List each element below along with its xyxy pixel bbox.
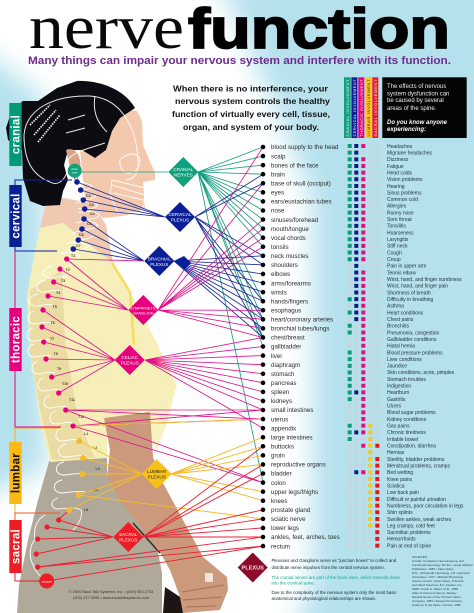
symptom list: Sterility, bladder problems bbox=[387, 457, 445, 463]
spine dots bbox=[34, 164, 87, 588]
symptom list: Blood sugar problems bbox=[387, 410, 436, 416]
body part list: arms/forearms bbox=[271, 280, 311, 287]
column headers: CERVICAL INVOLVEMENT bbox=[352, 79, 357, 136]
diamond: sacral plexus: SACRAL bbox=[119, 532, 138, 537]
symptom list: Ulcers bbox=[387, 404, 402, 410]
body part list: stomach bbox=[271, 371, 295, 378]
body part list: chest/breast bbox=[271, 335, 305, 342]
body part list: diaphragm bbox=[271, 362, 300, 369]
symptom list: Tonsilitis bbox=[387, 224, 406, 230]
vertebra labels: C5 bbox=[87, 222, 92, 226]
symptom list: Swollen ankles, weak arches bbox=[387, 517, 452, 523]
black callout box bbox=[382, 77, 467, 138]
body part list: elbows bbox=[271, 271, 290, 278]
sources: Publication, 1985 • Kapit, Elson bbox=[412, 567, 454, 571]
black callout box: The effects of nervous bbox=[387, 84, 446, 90]
symptom list: Numbness, poor circulation in legs bbox=[387, 503, 464, 509]
region tab: lumbar: lumbar bbox=[10, 453, 22, 493]
vertebra labels: C4 bbox=[90, 212, 95, 216]
symptom list: Sciatica bbox=[387, 484, 405, 490]
vertebra labels: T5 bbox=[52, 305, 57, 309]
diamond: celiac plexus: PLEXUS bbox=[121, 360, 139, 366]
vertebra labels: T12 bbox=[78, 415, 84, 419]
symptom list: Asthma bbox=[387, 304, 404, 310]
symptom list: Skin conditions, acne, pimples bbox=[387, 370, 455, 376]
vertebra labels: C6 bbox=[79, 233, 84, 237]
vertebra labels: C1 bbox=[74, 177, 79, 181]
body part list: blood supply to the head bbox=[271, 144, 339, 151]
body part list: bones of the face bbox=[271, 162, 319, 169]
body part list: ears/eustachian tubes bbox=[271, 199, 332, 206]
region tab: sacral bbox=[9, 520, 22, 573]
nerve lines: yellow lumbar bbox=[69, 419, 263, 519]
body part list: kidneys bbox=[271, 398, 292, 405]
sources: 1988 • Frank H. Netter, M.D., 1989 bbox=[412, 587, 458, 591]
diamond: brachial plexus bbox=[144, 246, 191, 276]
skull overlay bbox=[24, 96, 145, 213]
symptom list: Low back pain bbox=[387, 490, 419, 496]
column headers: SACRAL INVOLVEMENT bbox=[373, 79, 378, 136]
symptom list: Hernias bbox=[387, 450, 405, 456]
symptom list: Wrist, hand, and finger numbness bbox=[387, 277, 462, 283]
symptom list: Pain in upper arm bbox=[387, 264, 426, 270]
symptom matrix bbox=[350, 144, 377, 548]
legend notes: distribute nerve impulses from the central nervous system. bbox=[272, 565, 385, 570]
intro paragraph bbox=[172, 84, 330, 132]
symptom list: Sinus problems bbox=[387, 190, 422, 196]
title bbox=[29, 0, 450, 62]
symptom list: Hoarseness bbox=[387, 230, 414, 236]
region tab: thoracic: thoracic bbox=[10, 316, 22, 363]
symptom list: Headaches bbox=[387, 144, 413, 150]
symptom list: Croup bbox=[387, 257, 401, 263]
vertebra labels: T11 bbox=[69, 398, 75, 402]
subtitle: Many things can impair your nervous system and interfere with its function. bbox=[28, 55, 451, 67]
body part list: groin bbox=[271, 453, 285, 460]
hair bbox=[6, 81, 135, 206]
symptom list: Head colds bbox=[387, 170, 413, 176]
sources: Medical Series of the Thoracic Spine, bbox=[412, 595, 462, 599]
symptom list: Shin splints bbox=[387, 510, 413, 516]
symptom list: Kidney conditions bbox=[387, 417, 427, 423]
body part list: vocal chords bbox=[271, 235, 306, 242]
diamond: cervical plexus: CERVICAL bbox=[169, 212, 192, 217]
symptom list: Liver conditions bbox=[387, 357, 422, 363]
nerve lines: teal cranial bbox=[75, 147, 263, 483]
body part list: gallbladder bbox=[271, 344, 301, 351]
body part list: wrists bbox=[270, 289, 287, 296]
body part list: lower legs bbox=[271, 525, 299, 532]
symptom list: Leg cramps, cold feet bbox=[387, 523, 435, 529]
sources: Atlas of Human Anatomy, Stanley bbox=[412, 591, 457, 595]
sources: Associates, 1977 • Mitchell Physiology, bbox=[412, 575, 464, 579]
vertebra labels: L2 bbox=[93, 446, 97, 450]
spine dots: stem bbox=[72, 170, 78, 174]
plexus legend diamond bbox=[238, 552, 268, 582]
symptom list: Runny nose bbox=[387, 210, 414, 216]
black callout box: be caused by several bbox=[387, 98, 444, 104]
body part list: upper legs/thighs bbox=[271, 489, 318, 496]
symptom list: Heart conditions bbox=[387, 310, 424, 316]
nerve lines: navy cervical and brachial bbox=[73, 174, 263, 338]
diamond: lumbar plexus bbox=[142, 459, 172, 489]
legend notes: Due to the complexity of the nervous system only the most basic bbox=[272, 590, 397, 595]
vertebra labels: L1 bbox=[84, 432, 88, 436]
arm shadow edge bbox=[133, 523, 160, 553]
symptom list: Knee pains bbox=[387, 477, 413, 483]
symptom list: Menstrual problems, cramps bbox=[387, 464, 451, 470]
vertebra labels: T10 bbox=[62, 382, 68, 386]
symptom list: Chronic tiredness bbox=[387, 430, 426, 436]
vertebra labels: T1 bbox=[71, 254, 75, 258]
body part list: bronchial tubes/lungs bbox=[271, 326, 329, 333]
diamond: sacral plexus bbox=[113, 522, 143, 552]
copyright: (303) 237 0090 • www.backtalksystems.com bbox=[73, 595, 149, 600]
legend notes bbox=[272, 558, 400, 601]
symptom list: Gallbladder conditions bbox=[387, 337, 437, 343]
spine shading bbox=[30, 270, 95, 460]
sources: Company, 1983 • Review Procedures, bbox=[412, 599, 463, 603]
body part dots bbox=[261, 147, 265, 547]
symptom list: Chest pains bbox=[387, 317, 414, 323]
symptom list: Common cold bbox=[387, 197, 418, 203]
symptom list: Blood pressure problems bbox=[387, 350, 443, 356]
symptom list: Bronchitis bbox=[387, 324, 409, 330]
sources: Source: Kunert, Vision News, Practical bbox=[412, 579, 464, 583]
symptom list: Gas pains bbox=[387, 424, 410, 430]
face bbox=[80, 108, 155, 218]
body part list: nose bbox=[271, 208, 285, 215]
shirt bbox=[27, 223, 177, 462]
symptom list: Hemorrhoids bbox=[387, 537, 416, 543]
person illustration bbox=[6, 81, 228, 613]
body part list: reproductive organs bbox=[271, 462, 326, 469]
diamond: sympathetic ganglion: GANGLION bbox=[133, 310, 154, 316]
vertebra labels: L4 bbox=[94, 488, 98, 492]
diamond: celiac plexus: CELIAC bbox=[121, 355, 139, 360]
region tab: cervical: cervical bbox=[10, 193, 22, 239]
black callout box: Do you know anyone bbox=[387, 120, 448, 126]
symptom list: Wrist, hand, and finger pain bbox=[387, 284, 448, 290]
pants bbox=[17, 458, 162, 613]
symptom list: Migraine headaches bbox=[387, 150, 433, 156]
intro paragraph: organ, and system of your body. bbox=[183, 122, 319, 132]
body part list: pancreas bbox=[271, 380, 296, 387]
column headers: LUMBAR INVOLVEMENT bbox=[366, 79, 371, 136]
region tab: sacral: sacral bbox=[10, 529, 22, 564]
vertebra labels: C3 bbox=[89, 203, 94, 207]
body part list bbox=[270, 144, 340, 550]
black callout box: system dysfunction can bbox=[387, 91, 449, 97]
body part list: ankles, feet, arches, toes bbox=[271, 534, 340, 541]
legend notes: Plexuses and Ganglions serve as "junction boxes" to collect and bbox=[272, 558, 397, 563]
symptom list: Pain at end of spine bbox=[387, 543, 431, 549]
symptom list: Gastritis bbox=[387, 397, 406, 403]
symptom list: Jaundice bbox=[387, 364, 407, 370]
body part list: bladder bbox=[271, 471, 292, 478]
body part list: sinuses/forehead bbox=[271, 217, 319, 224]
body part list: scalp bbox=[271, 153, 286, 160]
body part list: uterus bbox=[271, 416, 288, 423]
symptom list: Constipation, diarrhea bbox=[387, 444, 436, 450]
symptom list: Hiatal hernia bbox=[387, 344, 415, 350]
symptom list: Sore throat bbox=[387, 217, 412, 223]
body part list: hands/fingers bbox=[271, 298, 308, 305]
symptom list: Fatigue bbox=[387, 164, 404, 170]
symptom list: Bed wetting bbox=[387, 470, 413, 476]
collar fold bbox=[112, 263, 134, 345]
vertebra labels: L3 bbox=[96, 467, 100, 471]
intro paragraph: function of virtually every cell, tissue, bbox=[172, 109, 330, 119]
symptom list: Irritable bowel bbox=[387, 437, 418, 443]
column headers: CRANIAL INVOLVEMENT bbox=[345, 79, 350, 136]
fingers bbox=[182, 585, 224, 607]
nerve lines: red sacral bbox=[36, 446, 263, 581]
region tab: thoracic bbox=[9, 308, 22, 371]
legend notes: The cranial nerves are part of the brain stem, which extends down bbox=[272, 575, 400, 580]
sources: Functional Neurology, 4th Ed., Lange Medical bbox=[412, 563, 473, 567]
body part list: knees bbox=[271, 498, 288, 505]
diamond: cervical plexus: PLEXUS bbox=[171, 218, 189, 222]
legend notes: anatomical and physiological relationships are shown. bbox=[272, 596, 376, 601]
symptom list: Shortness of breath bbox=[387, 290, 431, 296]
sources: Chusid, Correlative Neuroanatomy and bbox=[412, 559, 464, 563]
symptom list bbox=[387, 144, 464, 549]
vertebra labels: T8 bbox=[54, 352, 58, 356]
sources: M.D., Orthopedic Neurology, J.B. Lippincott bbox=[412, 571, 470, 575]
symptom list: Heartburn bbox=[387, 390, 409, 396]
symptom list: Difficult or painful urination bbox=[387, 497, 446, 503]
diamond: sympathetic ganglion: SYMPATHETIC bbox=[130, 306, 157, 310]
diamond: cranial nerves: NERVES bbox=[174, 172, 193, 178]
body part list: esophagus bbox=[271, 308, 301, 314]
body part list: base of skull (occiput) bbox=[271, 180, 331, 188]
spine connector lines bbox=[15, 180, 72, 581]
vertebra labels: T6 bbox=[50, 321, 55, 325]
plexus legend diamond: PLEXUS bbox=[242, 566, 264, 572]
column headers bbox=[344, 77, 378, 138]
diamond: lumbar plexus: LUMBAR bbox=[147, 469, 167, 474]
copyright: © 2000 Back Talk Systems, Inc. • (800) 553 2733 bbox=[69, 589, 153, 594]
vertebra labels: C7 bbox=[76, 244, 81, 248]
body part list: rectum bbox=[271, 543, 290, 550]
body part list: tonsils bbox=[271, 244, 289, 251]
body part list: colon bbox=[271, 480, 286, 487]
symptom list: Laryngitis bbox=[387, 237, 409, 243]
diamond: sacral plexus: PLEXUS bbox=[119, 538, 137, 542]
body part list: brain bbox=[271, 171, 285, 178]
diamond: brachial plexus: BRACHIAL bbox=[148, 256, 171, 262]
vertebra labels: T9 bbox=[57, 367, 61, 371]
vertebra labels: T7 bbox=[50, 337, 54, 341]
column headers: THORACIC INVOLVEMENT bbox=[359, 79, 364, 136]
spine overlay bbox=[27, 182, 100, 579]
copyright bbox=[69, 589, 153, 600]
body part list: spleen bbox=[271, 389, 290, 396]
region tab: cranial: cranial bbox=[10, 115, 22, 154]
sources: SOURCES: bbox=[412, 555, 428, 559]
vertebra labels: T2 bbox=[66, 268, 70, 272]
neck bbox=[40, 195, 113, 263]
sources: Anatomy of the Spine, Century, 1995 bbox=[412, 603, 461, 607]
symptom list: Allergies bbox=[387, 204, 407, 210]
symptom list: Stomach troubles bbox=[387, 377, 426, 383]
vertebra labels: T4 bbox=[56, 291, 60, 295]
intro paragraph: nervous system controls the healthy bbox=[175, 96, 330, 106]
legend notes: into the cervical spine. bbox=[272, 580, 315, 585]
body part list: large intestines bbox=[271, 434, 313, 441]
symptom list: Hearing bbox=[387, 184, 405, 190]
symptom list: Stiff neck bbox=[387, 244, 408, 250]
symptom list: Cough bbox=[387, 250, 402, 256]
vertebra labels: L5 bbox=[84, 508, 88, 512]
body part list: heart/coronary arteries bbox=[271, 316, 333, 324]
spine dots: brain bbox=[72, 167, 78, 171]
symptom list: Tennis elbow bbox=[387, 270, 416, 276]
black callout box: experiencing: bbox=[387, 127, 426, 133]
region tab: lumbar bbox=[9, 442, 22, 504]
sources bbox=[412, 555, 473, 607]
vertebra labels bbox=[50, 177, 100, 512]
diamond: cranial nerves: CRANIAL bbox=[173, 167, 194, 172]
shirt tail behind arm bbox=[143, 392, 175, 450]
spine dots: coccyx bbox=[42, 580, 52, 584]
body part list: appendix bbox=[271, 425, 297, 432]
diamond: cervical plexus bbox=[165, 202, 195, 232]
symptom list: Sacroiliac problems bbox=[387, 530, 431, 536]
intro paragraph: When there is no interference, your bbox=[173, 84, 329, 94]
body part list: sciatic nerve bbox=[271, 516, 306, 523]
body part list: prostate gland bbox=[271, 507, 311, 514]
arm bbox=[104, 412, 228, 613]
nerve lines: pink thoracic bbox=[42, 147, 263, 483]
symptom list: Difficulty in breathing bbox=[387, 297, 434, 303]
symptom list: Pneumonia, congestion bbox=[387, 330, 439, 336]
diamond: brachial plexus: PLEXUS bbox=[150, 262, 168, 267]
body part list: buttocks bbox=[271, 444, 294, 450]
region tab: cranial bbox=[9, 103, 22, 166]
black callout box: areas of the spine. bbox=[387, 106, 437, 112]
body part list: mouth/tongue bbox=[271, 226, 309, 233]
sources: and Allied Sciences, B.C. Decker, Inc. bbox=[412, 583, 462, 587]
diamond: cranial nerves bbox=[168, 157, 198, 187]
ear bbox=[66, 149, 80, 176]
hand shadow bbox=[163, 587, 183, 613]
vertebra labels: C2 bbox=[86, 194, 91, 198]
symptom list: Vision problems bbox=[387, 177, 423, 183]
vertebra labels: T3 bbox=[61, 279, 65, 283]
body part list: neck muscles bbox=[271, 253, 308, 260]
body part list: liver bbox=[271, 353, 282, 360]
body part list: small intestines bbox=[271, 407, 313, 414]
diamond: lumbar plexus: PLEXUS bbox=[148, 474, 166, 480]
symptom list: Indigestion bbox=[387, 384, 411, 390]
region tab: cervical bbox=[9, 185, 22, 247]
body part list: shoulders bbox=[271, 262, 298, 269]
body part list: eyes bbox=[271, 190, 284, 197]
symptom list: Dizziness bbox=[387, 157, 409, 163]
diamond: celiac plexus bbox=[115, 345, 145, 375]
diamond: sympathetic ganglion bbox=[128, 295, 158, 325]
